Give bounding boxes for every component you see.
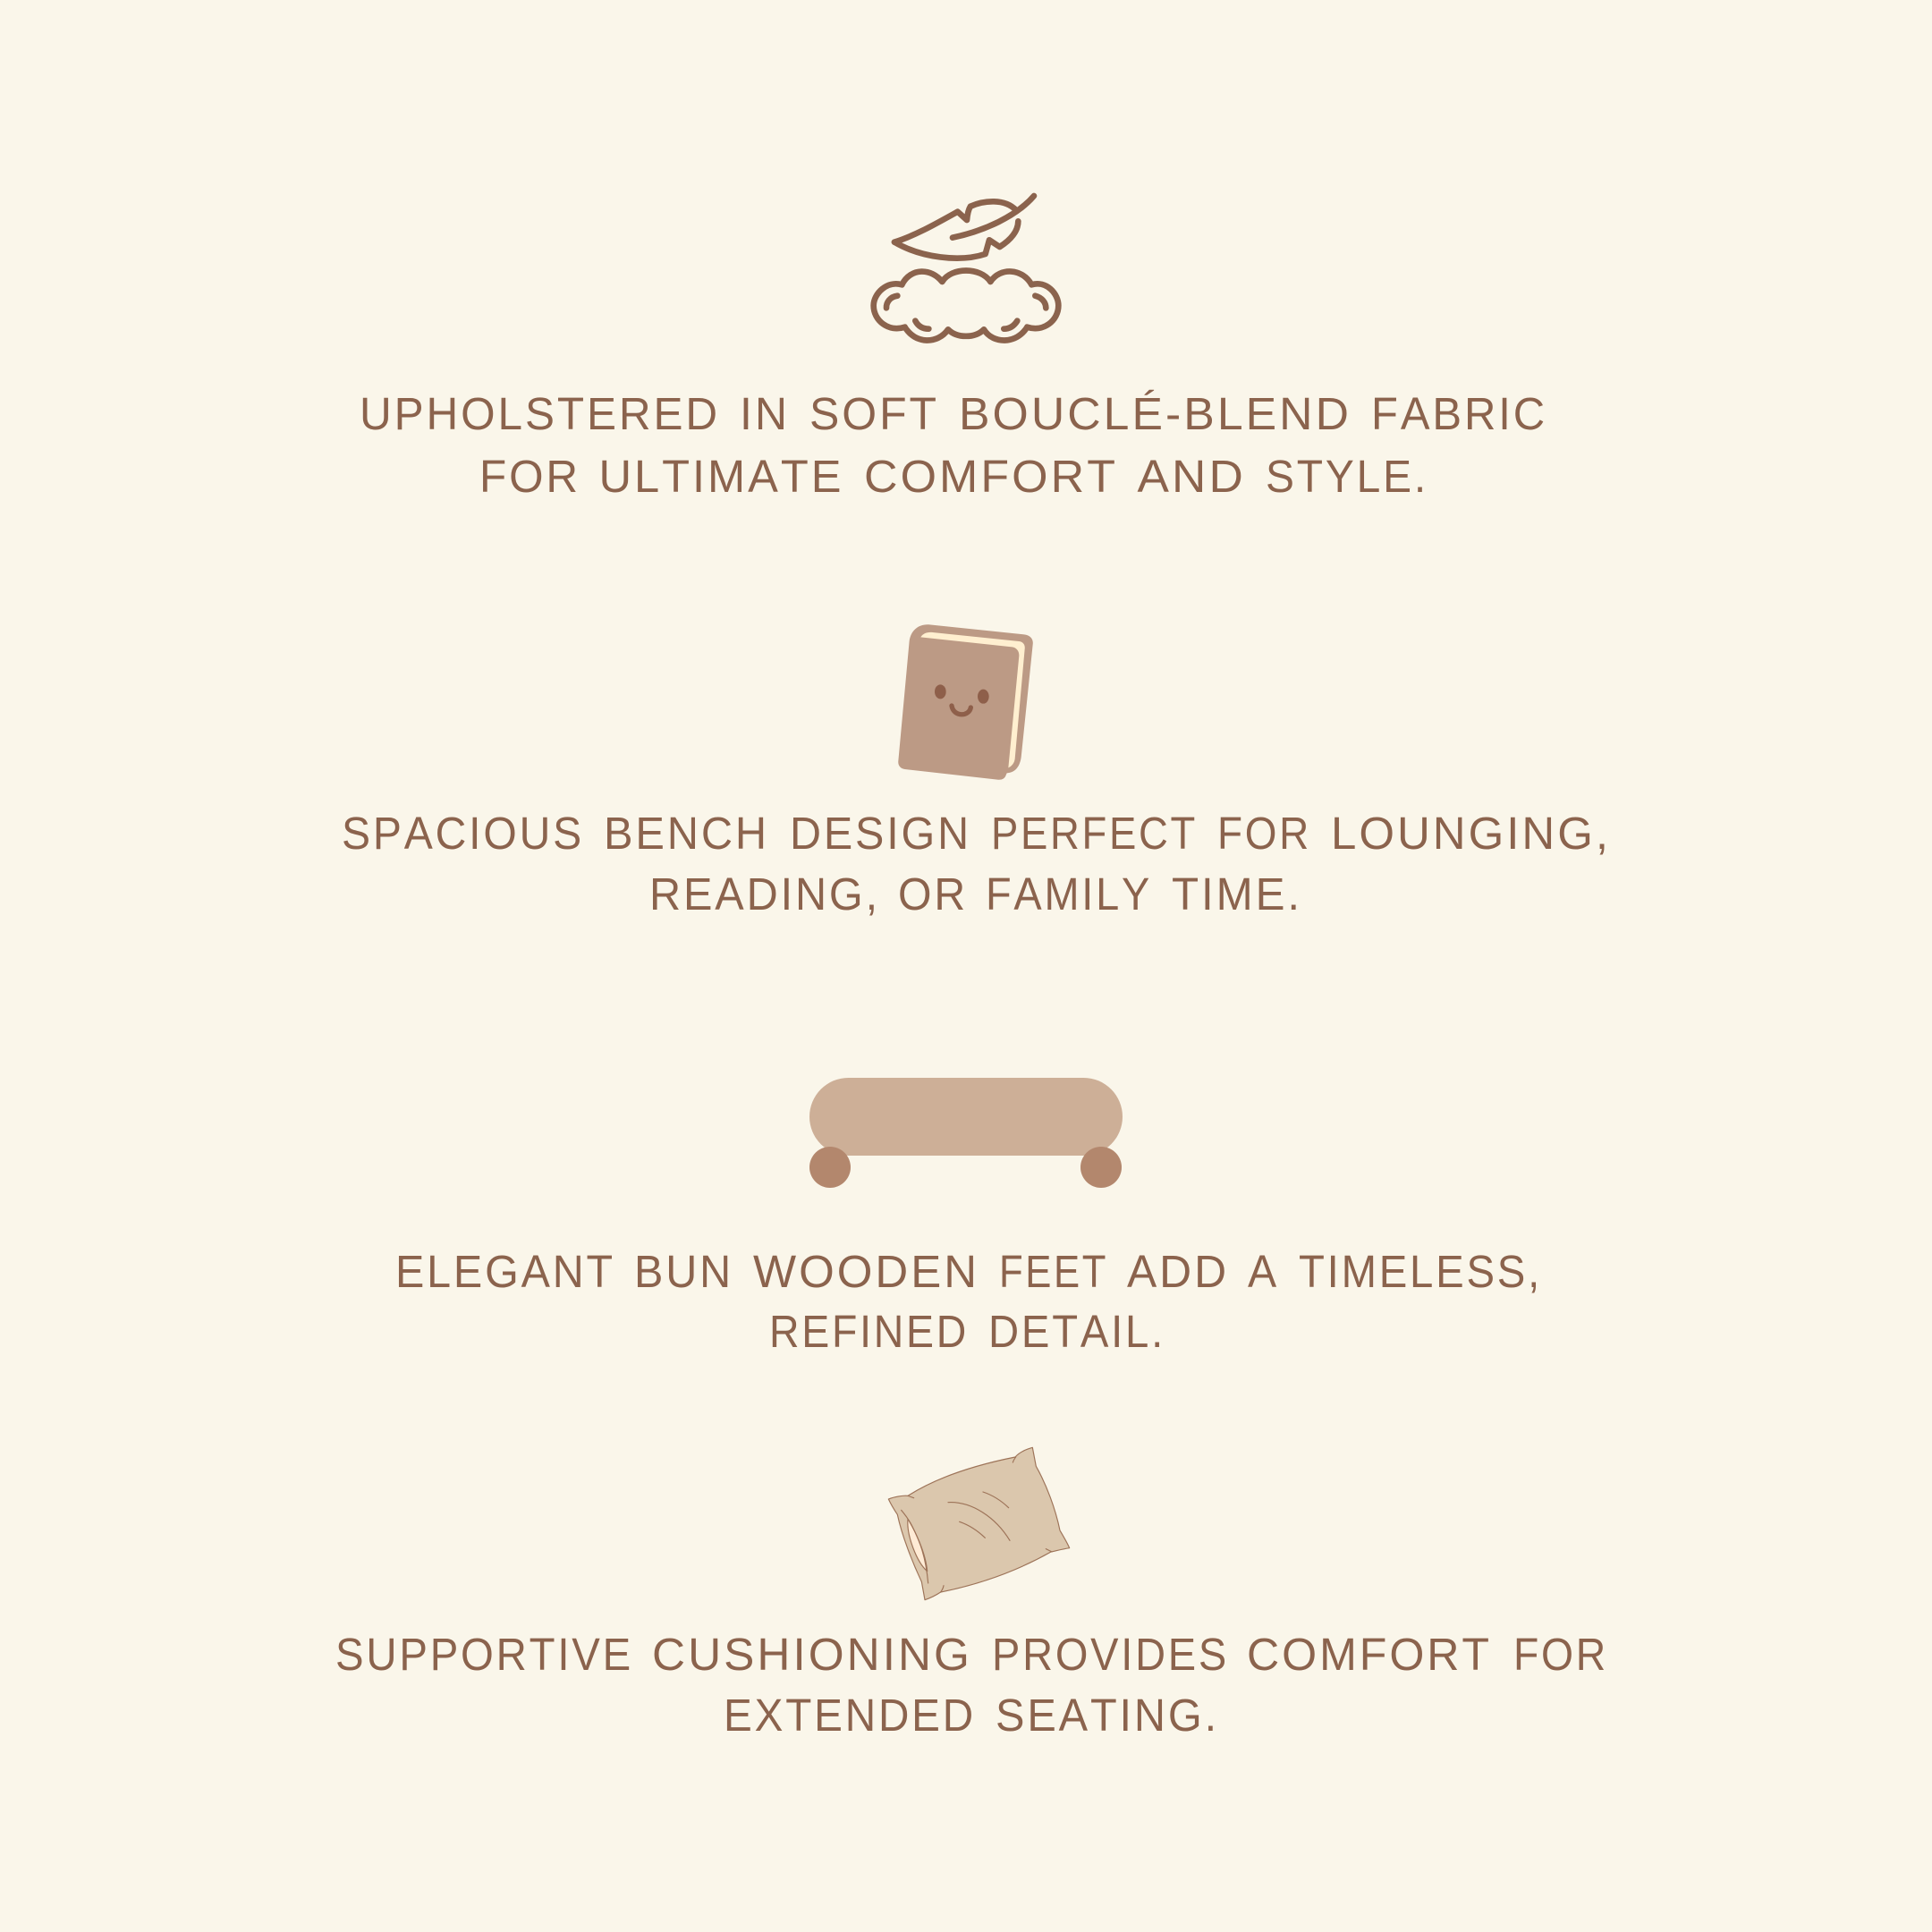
text: wooden feet description (395, 1246, 1542, 1357)
text: bench design description: BENCH (604, 808, 769, 859)
icon: smiling book (898, 624, 1033, 780)
text: fabric description (360, 388, 1547, 502)
text: wooden feet description: A (1248, 1246, 1279, 1297)
panel: fabric feature (360, 196, 1547, 502)
text: wooden feet description: TIMELESS, (1299, 1246, 1542, 1297)
panel: bench design feature (342, 624, 1611, 919)
text: cushioning description: COMFORT (1247, 1629, 1492, 1680)
text: bench design description (342, 808, 1611, 919)
text: fabric description: IN (740, 388, 790, 439)
text: wooden feet description: BUN (634, 1246, 733, 1297)
text: cushioning description: EXTENDED (724, 1690, 976, 1741)
text: wooden feet description: WOODEN (753, 1246, 979, 1297)
panel: cushioning feature (335, 1447, 1608, 1741)
icon: pillow (888, 1447, 1070, 1600)
icon: bench with bun feet (809, 1078, 1123, 1188)
text: cushioning description: FOR (1513, 1629, 1608, 1680)
text: bench design description: READING, (649, 869, 880, 919)
text: wooden feet description: REFINED (769, 1306, 969, 1357)
text: cushioning description: PROVIDES (992, 1629, 1229, 1680)
text: fabric description: UPHOLSTERED (360, 388, 720, 439)
text: wooden feet description: DETAIL. (988, 1306, 1165, 1357)
text: bench design description: PERFECT (991, 808, 1198, 859)
text: bench design description: DESIGN (790, 808, 971, 859)
text: fabric description: FABRIC (1371, 388, 1547, 439)
text: fabric description: BOUCLÉ-BLEND (959, 388, 1352, 439)
text: bench design description: FOR (1217, 808, 1311, 859)
text: bench design description: SPACIOUS (342, 808, 584, 859)
text: fabric description: FOR (479, 451, 580, 502)
text: fabric description: ULTIMATE (599, 451, 844, 502)
icon: feather above cloud (874, 196, 1058, 341)
text: cushioning description: SEATING. (996, 1690, 1219, 1741)
text: fabric description: SOFT (809, 388, 939, 439)
text: bench design description: TIME. (1172, 869, 1302, 919)
text: wooden feet description: FEET (999, 1246, 1108, 1297)
text: wooden feet description: ADD (1127, 1246, 1229, 1297)
text: cushioning description: SUPPORTIVE (335, 1629, 633, 1680)
text: fabric description: COMFORT (864, 451, 1118, 502)
text: bench design description: OR (898, 869, 968, 919)
text: bench design description: FAMILY (986, 869, 1152, 919)
text: cushioning description (335, 1629, 1608, 1741)
text: cushioning description: CUSHIONING (652, 1629, 972, 1680)
panel: wooden feet feature (395, 1078, 1542, 1357)
text: wooden feet description: ELEGANT (395, 1246, 615, 1297)
text: fabric description: STYLE. (1266, 451, 1428, 502)
text: bench design description: LOUNGING, (1331, 808, 1611, 859)
text: fabric description: AND (1138, 451, 1246, 502)
